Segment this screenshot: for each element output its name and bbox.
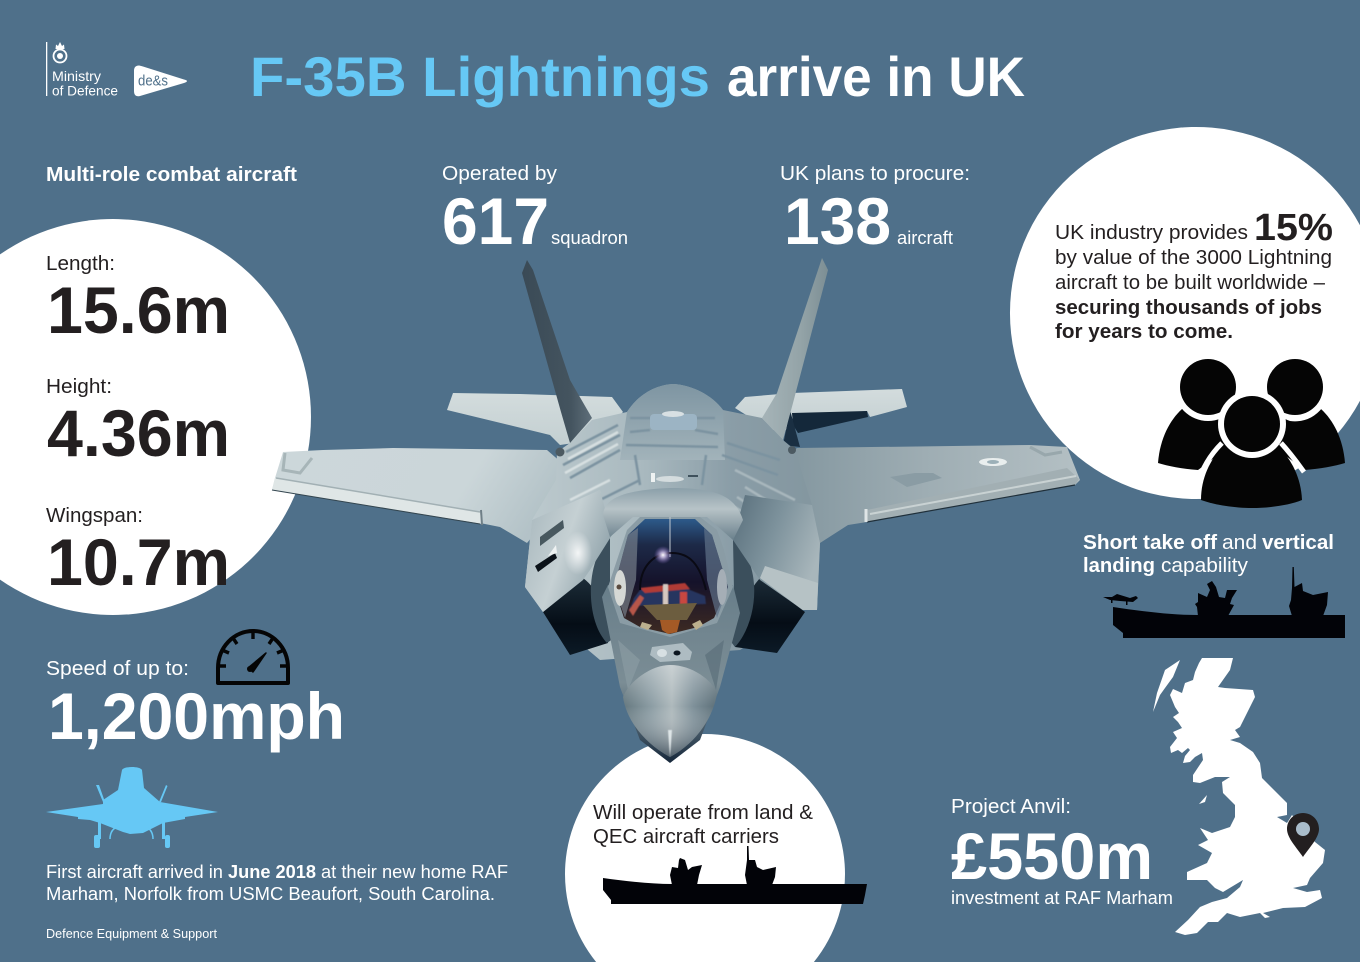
logo: de&s: de&s xyxy=(138,74,168,90)
right stabilizer xyxy=(735,389,907,430)
text block: will operate: Will operate from land & xyxy=(593,801,813,824)
stat: operated by: 617 xyxy=(442,184,549,258)
left fin xyxy=(522,260,592,443)
right intake lip xyxy=(760,566,818,610)
panel: UK industry circle xyxy=(1010,127,1360,499)
text block: UK industry: by value of the 3000 Lightning xyxy=(1055,246,1332,269)
wing patch xyxy=(890,473,942,487)
stat: project anvil xyxy=(951,795,1173,908)
text block: UK industry: for years to come. xyxy=(1055,320,1233,343)
icon: carrier xyxy=(603,846,867,904)
right wing xyxy=(770,445,1080,543)
stat: height: 4.36m xyxy=(47,396,230,470)
logo: Ministry of Defence xyxy=(46,42,118,98)
stat: wingspan: 10.7m xyxy=(47,525,230,599)
left wing flap xyxy=(272,453,482,525)
stat: height: Height: xyxy=(46,375,112,398)
logo: Ministry of Defence: Ministry xyxy=(52,68,101,84)
text block: short take off: capability xyxy=(1161,554,1249,577)
icon: speedometer xyxy=(218,631,288,683)
icon: people group xyxy=(1158,353,1345,508)
left wing xyxy=(272,448,570,543)
logo: Ministry of Defence: of Defence xyxy=(52,82,118,98)
stabilizer shadow xyxy=(792,411,868,433)
left intake xyxy=(543,578,608,655)
fuselage hump xyxy=(620,384,725,460)
panel: carriers circle xyxy=(565,734,845,962)
stat: UK plans to procure: UK plans to procure: xyxy=(780,162,970,185)
fuselage base xyxy=(525,384,820,660)
stat: UK plans to procure: 138 xyxy=(784,184,891,258)
centre fuselage hood xyxy=(603,488,743,540)
fuselage badge xyxy=(650,411,697,430)
union flag reflection xyxy=(628,583,706,616)
engine pods beside canopy xyxy=(591,537,754,647)
stat: UK plans to procure xyxy=(780,162,970,258)
right wing flap xyxy=(866,447,1079,522)
title: F-35B Lightnings xyxy=(250,45,710,108)
stat: UK plans to procure: aircraft xyxy=(897,227,953,248)
text block: UK industry: UK industry provides xyxy=(1055,221,1248,244)
text block: short take off: Short take off xyxy=(1083,531,1217,554)
text block: short take off: and xyxy=(1222,531,1257,554)
photo: F-35B jet xyxy=(272,258,1080,763)
heading: multi-role: Multi-role combat aircraft xyxy=(46,163,297,186)
text block: short take off: landing xyxy=(1083,554,1155,577)
text block: first aircraft: June 2018 xyxy=(228,861,316,882)
fin root bolts xyxy=(556,446,796,456)
right intake xyxy=(735,578,805,653)
text block: will operate: QEC aircraft carriers xyxy=(593,825,779,848)
stat: project anvil: Project Anvil: xyxy=(951,795,1071,818)
title: arrive in UK xyxy=(727,45,1025,108)
stat: operated by xyxy=(442,162,628,258)
fuselage panel stripes xyxy=(560,418,812,557)
text block: will operate xyxy=(593,801,813,848)
footer text: Defence Equipment & Support xyxy=(46,926,217,941)
nose cone xyxy=(623,665,717,757)
canopy frame xyxy=(608,517,733,637)
stat: operated by: squadron xyxy=(551,227,628,248)
stat: wingspan: Wingspan: xyxy=(46,504,143,527)
left stabilizer xyxy=(447,393,623,445)
stat: operated by: Operated by xyxy=(442,162,558,185)
sensor window xyxy=(650,643,692,662)
panel: dimensions circle xyxy=(0,219,311,615)
text block: UK industry: aircraft to be built worldwide – xyxy=(1055,271,1326,294)
map: United Kingdom xyxy=(1153,658,1325,935)
text block: short take off: vertical xyxy=(1262,531,1334,554)
chin xyxy=(602,585,740,763)
text block: first aircraft: First aircraft arrived in xyxy=(46,861,223,882)
icon: location pin xyxy=(1287,813,1319,857)
stat: speed: 1,200mph xyxy=(48,679,345,753)
logo: de&s xyxy=(134,66,187,96)
stat: project anvil: investment at RAF Marham xyxy=(951,887,1173,908)
centre deck details xyxy=(651,473,698,482)
stat: length: Length: xyxy=(46,252,115,275)
icon: blue jet silhouette xyxy=(46,767,218,848)
icon: carrier with jet xyxy=(1103,567,1345,638)
text block: UK industry xyxy=(1055,207,1333,343)
stat: project anvil: £550m xyxy=(951,819,1153,893)
stat: length: 15.6m xyxy=(47,273,230,347)
text block: short take off xyxy=(1083,531,1334,577)
left gills xyxy=(535,520,564,572)
text block: first aircraft: at their new home RAF xyxy=(321,861,508,882)
right cheek panel xyxy=(733,495,820,610)
text block: UK industry: securing thousands of jobs xyxy=(1055,296,1322,319)
text block: first aircraft: Marham, Norfolk from USMC Beaufort, South Carolina. xyxy=(46,883,495,904)
canopy glass xyxy=(614,517,728,634)
text block: first aircraft xyxy=(46,861,508,904)
text block: UK industry: 15% xyxy=(1254,207,1333,249)
wing roundel xyxy=(979,458,1007,466)
icon: royal crest xyxy=(54,42,66,62)
stat: speed: Speed of up to: xyxy=(46,657,189,680)
left cheek panel xyxy=(525,490,612,612)
title xyxy=(250,45,1025,108)
right fin xyxy=(762,258,828,440)
